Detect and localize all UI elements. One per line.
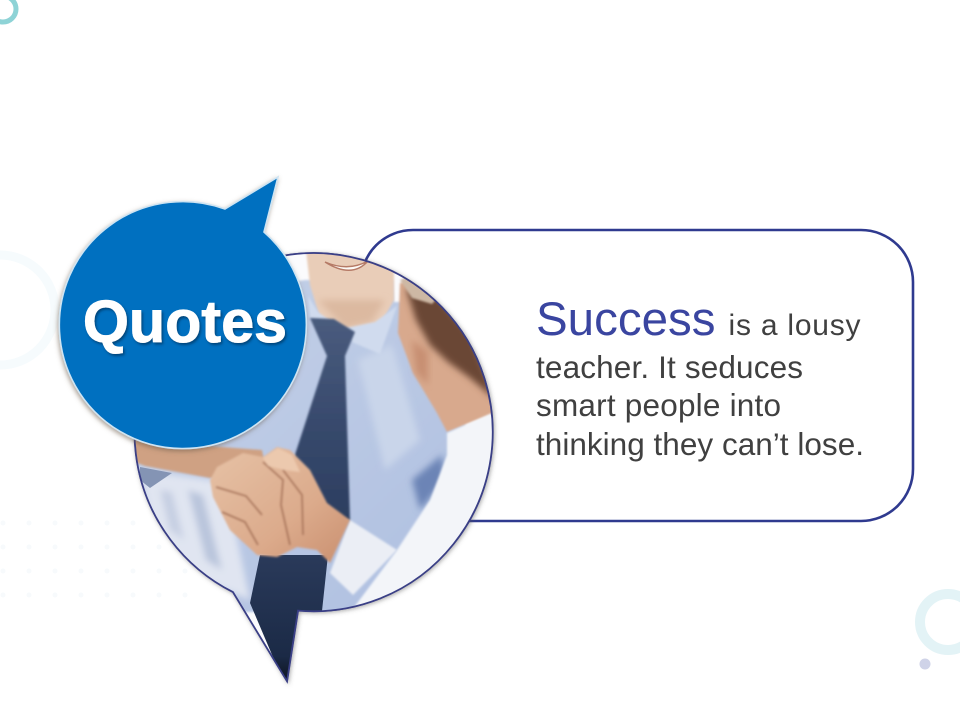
blue bubble shape [59,177,306,449]
white back of shirt [352,413,496,610]
bubble outline [135,253,493,681]
quote line 3: smart people into [536,387,781,423]
bubble heading: Quotes [83,289,287,355]
tie lower [250,555,328,690]
left fold [188,490,222,570]
finger lines [216,462,303,545]
photo backdrop [245,254,492,656]
shaking hands [210,447,350,563]
ear shading [412,340,428,385]
left forearm [130,440,268,480]
left sleeve pale area [140,470,250,600]
background dot: bottom right [920,658,930,670]
shadow patch right [412,455,445,510]
highlight between the two men [393,279,402,303]
background dot grid [0,520,188,598]
hand shape [210,447,350,563]
background ring: left pale [0,255,55,365]
thumb [263,448,300,472]
smile [325,261,368,270]
quote line 2: teacher. It seduces [536,349,803,385]
quote line 4: thinking they can’t lose. [536,426,864,462]
chest highlight [360,348,419,467]
shirt highlights and folds [140,345,445,600]
hair highlight [400,278,436,305]
left fold second [160,490,184,540]
quote line 1: Success is a lousy [536,293,861,346]
quote text [536,293,864,462]
bubble base with shadow [135,253,493,681]
photo speech bubble [130,250,500,690]
left shirt cuff shadow [140,467,172,488]
shirt cuff [330,520,397,595]
handshake photo [130,250,500,690]
quote panel outline [361,230,913,521]
background ring: top left [0,0,16,22]
neck shading [318,300,385,328]
tie upper [294,316,356,521]
head of right man [398,275,496,432]
background ring: bottom right [920,594,960,650]
quotes speech bubble [59,177,306,449]
collar [308,296,397,354]
shirt of facing man [130,280,470,612]
face and neck [306,250,394,332]
hair [406,288,496,400]
